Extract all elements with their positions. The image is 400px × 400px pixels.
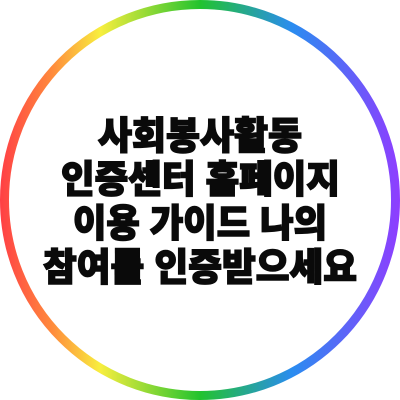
title line 2: 인증센터 홈페이지 <box>61 160 340 202</box>
title line 1: 사회봉사활동 <box>98 116 302 158</box>
title line 4: 참여를 인증받으세요 <box>43 248 357 290</box>
title line 3: 이용 가이드 나의 <box>73 204 327 246</box>
title <box>43 116 357 290</box>
